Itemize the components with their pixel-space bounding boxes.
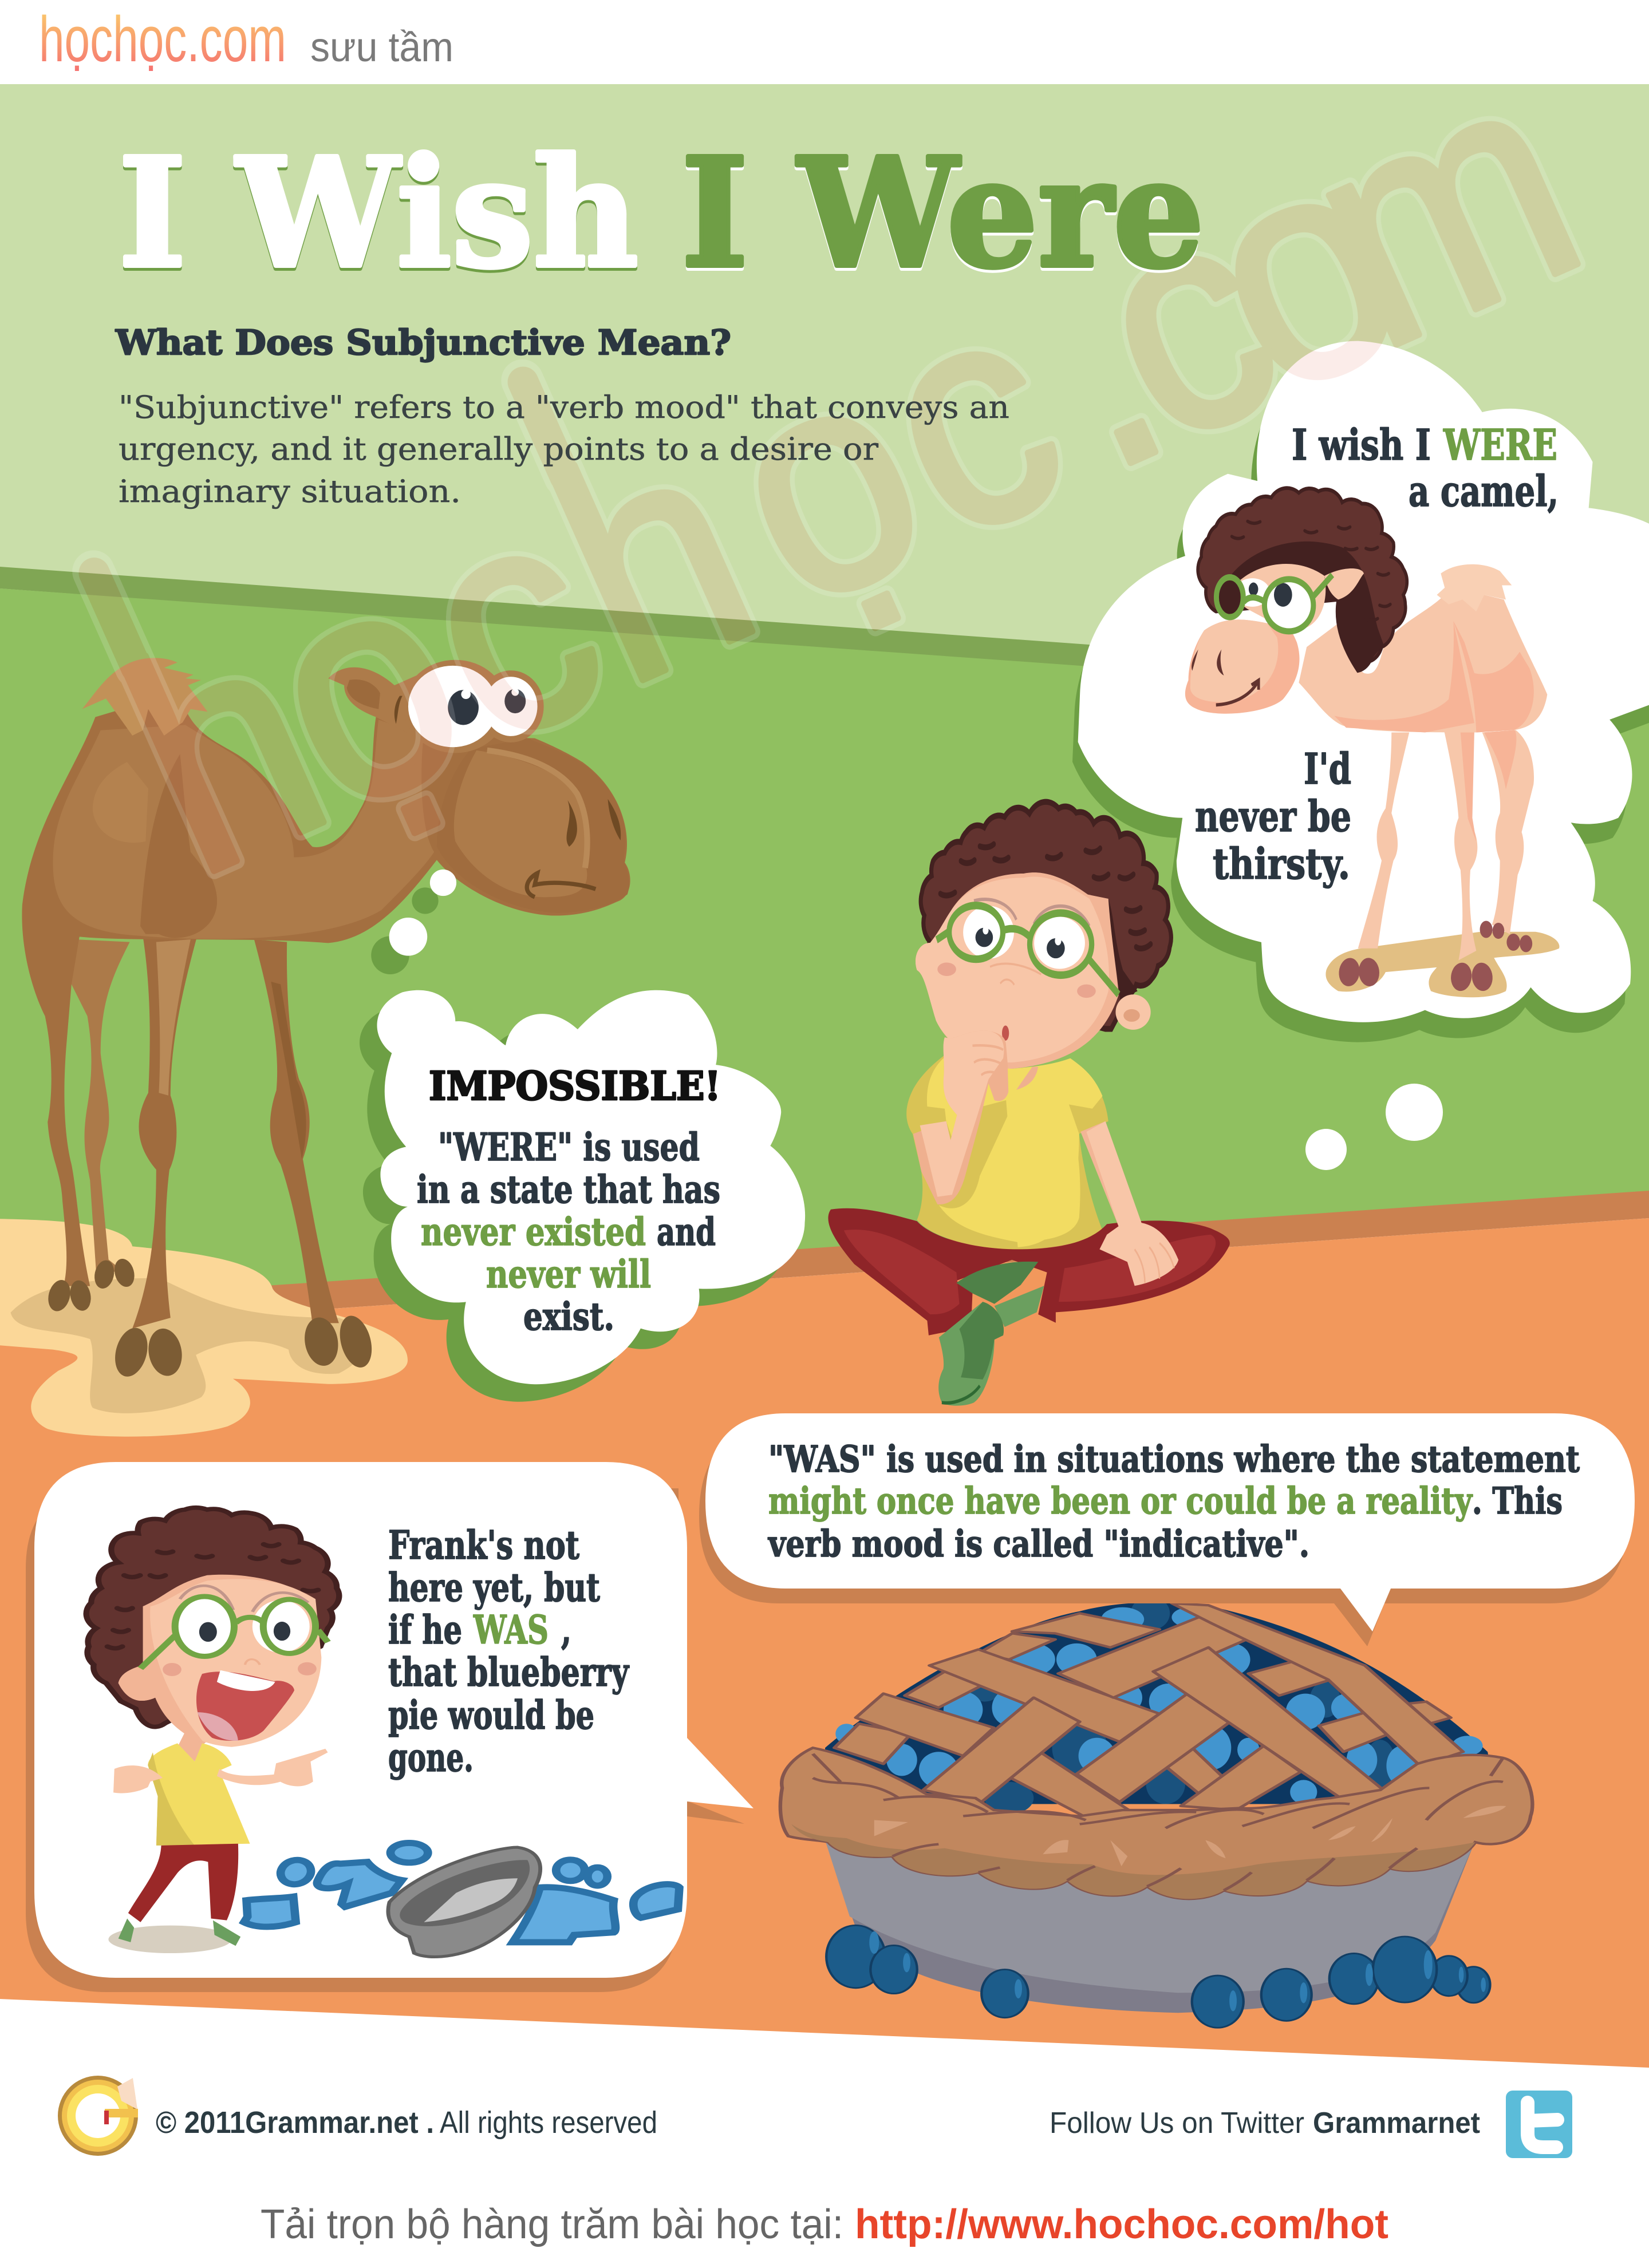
mouth — [527, 873, 595, 897]
footer: twitter follow: Grammarnet — [1313, 2107, 1480, 2140]
footer: copyright: All rights reserved — [440, 2105, 657, 2140]
bubble — [705, 1413, 1635, 1631]
logo: hochoc.com: sưu tầm — [310, 25, 453, 70]
footer: grammar.net logo — [58, 2076, 138, 2156]
frank text: that blueberry — [388, 1650, 630, 1696]
frank text: pie would be — [388, 1693, 594, 1738]
logo: hochoc.com: họchọc.com — [39, 3, 286, 75]
boy pointing — [86, 1508, 339, 1953]
intro paragraph: "Subjunctive" refers to a "verb mood" that conveys an — [119, 389, 1009, 425]
crust — [780, 1748, 1532, 1899]
crust highlights — [874, 1806, 1506, 1866]
ear — [1324, 568, 1364, 599]
cloud text — [1195, 421, 1559, 889]
front legs — [1358, 733, 1409, 949]
glasses — [937, 906, 1119, 994]
title: I Were — [681, 125, 1204, 301]
sand — [1325, 932, 1559, 997]
background: ground edge — [0, 1191, 1649, 1331]
pie tin — [825, 1840, 1476, 2013]
shirt — [906, 1056, 1108, 1249]
cloud: impossible: never will — [486, 1252, 651, 1297]
cloud: impossible — [360, 990, 805, 1402]
ear — [328, 667, 419, 736]
frank text: , — [561, 1607, 571, 1653]
neck — [179, 1732, 207, 1761]
was text: might once have been or could be a reality — [768, 1480, 1473, 1523]
camel tuft — [82, 658, 207, 736]
blueberry pie — [780, 1597, 1532, 2028]
arm on knee — [1080, 1121, 1142, 1226]
cloud: impossible: never existed — [421, 1210, 646, 1254]
frank text: WAS — [473, 1607, 549, 1653]
bubble — [34, 1462, 754, 1978]
far rear leg — [72, 939, 130, 1275]
cloud: impossible: exist. — [523, 1294, 614, 1339]
arm at chin — [913, 1031, 1008, 1204]
footer: copyright: © 2011Grammar.net . — [156, 2105, 434, 2140]
cloud: impossible: IMPOSSIBLE! — [429, 1064, 721, 1109]
nose — [990, 963, 1041, 985]
big camel — [22, 658, 630, 1380]
cloud text: never be — [1195, 792, 1351, 841]
shoes — [119, 1918, 134, 1942]
rear legs — [1482, 730, 1534, 934]
cloud: camel dream — [1072, 341, 1649, 1042]
lattice strips — [834, 1603, 1463, 1822]
intro paragraph — [119, 389, 1009, 509]
bubble shadow — [699, 1428, 1628, 1646]
watermark: hochoc.com: họchọc.com — [82, 0, 1622, 939]
face — [119, 1575, 321, 1747]
background: orange ground — [0, 1218, 1649, 2068]
was text: . This — [1472, 1480, 1563, 1523]
ear — [1115, 994, 1151, 1030]
title: I Wish — [119, 125, 638, 301]
pants — [128, 1844, 238, 1922]
face — [916, 872, 1119, 1069]
thought circles from big camel — [371, 870, 456, 974]
background: light green sky — [0, 84, 1649, 714]
sand under big camel — [0, 1219, 408, 1437]
eyes — [404, 660, 507, 753]
cloud text: thirsty. — [1213, 840, 1350, 889]
cloud: impossible: "WERE" is used — [438, 1125, 700, 1169]
shoes and socks — [956, 1262, 1038, 1304]
frank text: gone. — [388, 1735, 474, 1781]
hair — [1198, 488, 1407, 671]
eyebrows — [974, 899, 1090, 926]
body shading — [93, 762, 148, 843]
cloud text: I'd — [1304, 745, 1351, 794]
title: I Were — [681, 128, 1204, 304]
small camel — [1185, 488, 1559, 997]
footer: twitter follow — [1050, 2107, 1480, 2140]
hooves — [45, 1257, 377, 1380]
title: I Wish — [119, 128, 638, 304]
was text: verb mood is called "indicative". — [767, 1523, 1309, 1566]
cheeks — [937, 962, 956, 976]
frank text: Frank's not — [388, 1523, 579, 1568]
intro paragraph: imaginary situation. — [119, 473, 461, 509]
head — [1185, 619, 1300, 714]
glasses — [1216, 575, 1332, 631]
body — [1299, 595, 1547, 733]
mouth — [1002, 1026, 1009, 1041]
speech bubble: frank — [26, 1462, 754, 1992]
was text — [767, 1438, 1580, 1566]
near front leg — [132, 937, 197, 1329]
boy sitting and thinking — [828, 802, 1230, 1406]
background: green stripe — [0, 567, 1649, 710]
hair — [86, 1508, 339, 1727]
hooves — [1336, 921, 1532, 994]
arms — [217, 1769, 281, 1785]
spilled blueberry filling and pan — [244, 1843, 679, 1957]
frank text — [388, 1523, 630, 1781]
watermark: hochoc.com: họchọc.com — [82, 0, 1622, 939]
nostrils — [566, 800, 577, 847]
heading: what does subjunctive mean: What Does Subjunctive Mean? — [115, 323, 731, 363]
background: green field — [0, 588, 1649, 1317]
far front leg — [254, 939, 339, 1323]
footer: copyright — [156, 2105, 657, 2140]
speech bubble: was — [699, 1413, 1635, 1646]
eyes — [177, 1598, 234, 1655]
cloud text: a camel, — [1409, 467, 1559, 516]
tuft — [1437, 564, 1512, 611]
open mouth — [196, 1672, 294, 1741]
glasses — [140, 1597, 328, 1669]
bubble shadow — [26, 1488, 744, 1992]
muzzle — [437, 738, 629, 913]
footer: download line — [261, 2202, 1388, 2247]
footer: download line: http://www.hochoc.com/hot — [855, 2202, 1388, 2247]
cloud text: I wish I — [1292, 421, 1431, 470]
icon: twitter — [1506, 2091, 1572, 2158]
title — [119, 125, 1204, 304]
neck — [1016, 1066, 1038, 1090]
cloud text: WERE — [1443, 421, 1557, 470]
pants — [828, 1208, 1230, 1335]
eyes — [963, 906, 1014, 959]
eyebrows — [180, 1586, 308, 1612]
thought circles from boy — [1305, 1084, 1443, 1170]
footer: download line: Tải trọn bộ hàng trăm bài học tại: — [261, 2202, 843, 2247]
hair — [921, 802, 1171, 1029]
filling — [825, 1602, 1497, 1804]
shirt — [148, 1743, 250, 1846]
cloud: impossible: in a state that has — [417, 1167, 720, 1212]
loose blueberries — [826, 1925, 1490, 2028]
intro paragraph: urgency, and it generally points to a desire or — [119, 431, 878, 467]
body and neck — [22, 709, 630, 1286]
crust folds — [813, 1754, 1503, 1890]
frank text: here yet, but — [388, 1565, 600, 1611]
footer: twitter follow: Follow Us on Twitter — [1050, 2107, 1304, 2140]
cheeks — [163, 1663, 182, 1676]
forehead and eyes — [1228, 564, 1325, 630]
cloud: impossible: and — [657, 1210, 716, 1254]
frank text: if he — [388, 1607, 462, 1653]
